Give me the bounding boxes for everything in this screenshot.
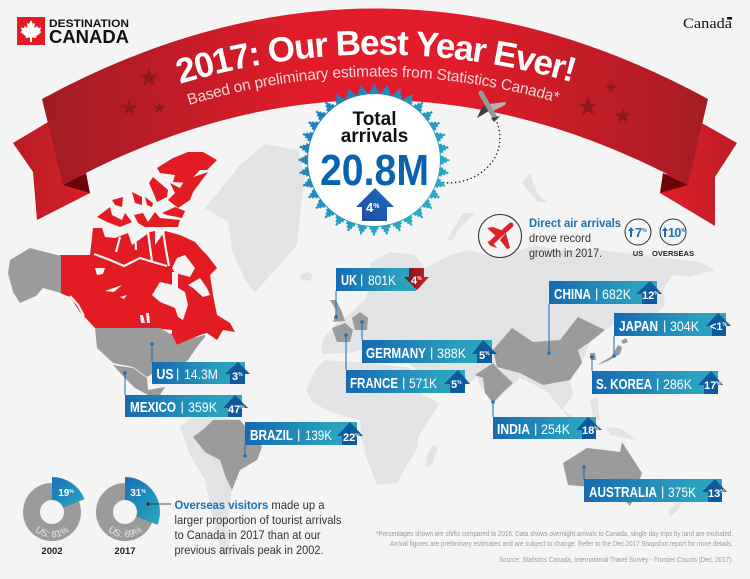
label: Brazil: % xyxy=(355,433,360,439)
callout: direct air arrivals: drove record xyxy=(529,231,591,245)
subtitle: Based on preliminary estimates from Statistics Canada* xyxy=(187,66,560,105)
map: India xyxy=(475,363,513,403)
stat: US: 7 xyxy=(635,225,642,240)
text block: overseas visitors: Overseas visitors made up a xyxy=(174,498,325,512)
logo: Destination Canada xyxy=(17,17,129,47)
text block: overseas visitors xyxy=(174,498,342,557)
label: South Korea: S. KOREA xyxy=(596,376,652,393)
ribbon right tail xyxy=(660,122,737,226)
donut chart: 2017 xyxy=(96,477,160,557)
stat: overseas: OVERSEAS xyxy=(652,249,694,258)
label: Brazil: | xyxy=(297,427,300,442)
label: US: 3 xyxy=(232,371,238,383)
map: China xyxy=(493,317,605,385)
label: Mexico: 47 xyxy=(228,404,240,416)
map: Germany xyxy=(352,312,368,330)
label: UK xyxy=(334,268,429,319)
label: Mexico: MEXICO xyxy=(130,399,176,416)
label: Japan: JAPAN xyxy=(619,318,658,335)
stars right: ★ xyxy=(577,92,599,121)
label: France: % xyxy=(457,380,462,386)
label: Japan: 304K xyxy=(670,318,700,334)
logo square with maple leaf xyxy=(17,17,45,45)
donut chart: 2017: 31 xyxy=(130,488,141,499)
map: France xyxy=(332,323,353,342)
ribbon banner xyxy=(13,8,737,226)
flight path xyxy=(432,122,500,183)
donut chart: 2002 xyxy=(23,477,84,557)
map: light grey continents xyxy=(180,144,715,557)
badge arrow xyxy=(356,188,394,221)
label: Japan: | xyxy=(663,318,666,333)
label: China: 12 xyxy=(642,290,654,302)
label: UK: % xyxy=(417,276,422,282)
label: France xyxy=(344,333,470,393)
label: India: % xyxy=(594,426,599,432)
stat: US: US xyxy=(633,249,643,258)
badge: total arrivals: arrivals xyxy=(341,126,408,147)
stat: US: % xyxy=(642,228,647,234)
label: Brazil: 22 xyxy=(343,432,355,444)
text block: overseas visitors: previous arrivals peak in 2002. xyxy=(174,543,324,557)
stars left xyxy=(119,63,166,121)
badge heading: Total xyxy=(353,109,396,130)
title: 2017: Our Best Year Ever! xyxy=(176,31,576,84)
donut chart: 2002: % xyxy=(69,489,74,495)
Canada channels xyxy=(70,231,169,316)
Canada bays, channels and lakes xyxy=(95,255,210,334)
stat: overseas xyxy=(652,219,694,258)
stars left: ★ xyxy=(119,96,139,121)
label: France: | xyxy=(402,375,405,390)
ribbon left tail xyxy=(13,122,90,220)
label: France: 5 xyxy=(451,379,457,391)
label: South Korea: % xyxy=(716,381,721,387)
logo: Destination Canada: CANADA xyxy=(49,27,129,47)
label: India: 18 xyxy=(582,425,594,437)
label: US xyxy=(150,342,250,384)
label: Mexico: 359K xyxy=(188,399,218,415)
badge: total arrivals xyxy=(300,86,448,234)
map: South Korea xyxy=(590,353,596,360)
stat: overseas: % xyxy=(681,228,686,234)
Canada red landmass xyxy=(60,152,235,345)
label: Germany: 5 xyxy=(479,350,485,362)
label: US: 14.3M xyxy=(184,366,218,382)
map: UK xyxy=(330,300,345,322)
label: Australia: % xyxy=(720,489,725,495)
label: Mexico xyxy=(123,371,248,417)
text block: overseas visitors: larger proportion of tourist arrivals xyxy=(174,513,342,527)
label: India: | xyxy=(534,421,537,436)
label: South Korea: | xyxy=(656,376,659,391)
ribbon main band xyxy=(42,8,708,185)
label: Germany: GERMANY xyxy=(366,345,426,362)
label: India xyxy=(491,400,602,439)
callout: direct air arrivals xyxy=(478,214,694,260)
label: Australia: 375K xyxy=(668,484,697,500)
stars right: ★ xyxy=(613,104,633,129)
stars right xyxy=(577,78,633,129)
stat: overseas: 10 xyxy=(668,226,681,240)
label: UK: UK xyxy=(341,272,357,289)
donut chart: 2017: US: 69% xyxy=(109,526,142,538)
donut chart: 2017: 2017 xyxy=(114,546,136,557)
label: China: % xyxy=(654,291,659,297)
donut leader line xyxy=(146,502,171,506)
footnote xyxy=(376,531,733,564)
label: South Korea: 286K xyxy=(663,376,693,392)
stars right: ★ xyxy=(604,78,618,97)
label: US: US xyxy=(156,366,174,383)
map: Alaska and US xyxy=(8,248,642,506)
label: Mexico: | xyxy=(180,399,184,414)
donut chart: 2002: 19 xyxy=(58,488,69,499)
label: Australia: | xyxy=(661,484,664,499)
label: Brazil xyxy=(243,422,363,458)
label: China: | xyxy=(595,286,598,301)
badge number: 20.8M xyxy=(320,146,429,195)
label: South Korea xyxy=(590,355,723,394)
label: Japan: <1 xyxy=(710,321,723,333)
label: China: CHINA xyxy=(554,286,591,303)
label: Australia: 13 xyxy=(708,488,720,500)
label: France: FRANCE xyxy=(350,375,398,392)
stars left: ★ xyxy=(138,63,160,92)
label: India: INDIA xyxy=(497,421,530,438)
label: Australia: AUSTRALIA xyxy=(589,484,657,501)
label: Germany xyxy=(360,320,497,363)
label: Brazil: BRAZIL xyxy=(250,427,293,444)
donut chart: 2002: 2002 xyxy=(41,546,63,557)
donut chart: 2002: US: 81% xyxy=(36,526,68,538)
ribbon folds xyxy=(63,173,90,193)
logo wordmark: DESTINATION xyxy=(49,18,129,30)
label: UK: 4 xyxy=(411,275,417,287)
air arrivals text: Direct air arrivals xyxy=(529,216,621,230)
label: Australia xyxy=(582,465,727,502)
icon: red plane xyxy=(478,214,522,258)
map: Brazil xyxy=(193,420,262,490)
label: Mexico: % xyxy=(240,405,245,411)
label: Japan: % xyxy=(723,322,728,328)
label: China: 682K xyxy=(602,286,632,302)
text block: overseas visitors: to Canada in 2017 than at our xyxy=(174,528,320,542)
donut chart: 2017: % xyxy=(141,489,146,495)
map: Japan xyxy=(597,345,622,365)
label: Japan xyxy=(612,313,731,358)
stat: US xyxy=(625,219,651,258)
label: US: % xyxy=(238,372,243,378)
label: France: 571K xyxy=(409,375,438,391)
badge arrow value: 4 xyxy=(366,200,373,215)
map: Australia xyxy=(563,442,642,500)
label: Germany: 388K xyxy=(437,345,467,361)
Canada wordmark: Canada xyxy=(683,16,732,32)
badge teeth xyxy=(307,93,441,227)
badge arrow value: % xyxy=(373,203,380,210)
label: US: | xyxy=(176,366,179,381)
map: Canada xyxy=(60,152,235,345)
stars left: ★ xyxy=(152,98,166,117)
label: UK: | xyxy=(360,272,363,287)
label: Germany: | xyxy=(430,345,433,360)
icon: plane xyxy=(477,93,506,122)
map: Mexico xyxy=(113,365,165,396)
label: India: 254K xyxy=(541,421,571,437)
label: UK: 801K xyxy=(368,272,397,288)
callout: direct air arrivals: growth in 2017. xyxy=(529,246,602,260)
label: South Korea: 17 xyxy=(704,380,716,392)
badge centre xyxy=(308,94,440,226)
label: Germany: % xyxy=(485,351,490,357)
label: China xyxy=(547,281,662,355)
world map xyxy=(8,144,715,557)
label: Brazil: 139K xyxy=(305,427,333,443)
